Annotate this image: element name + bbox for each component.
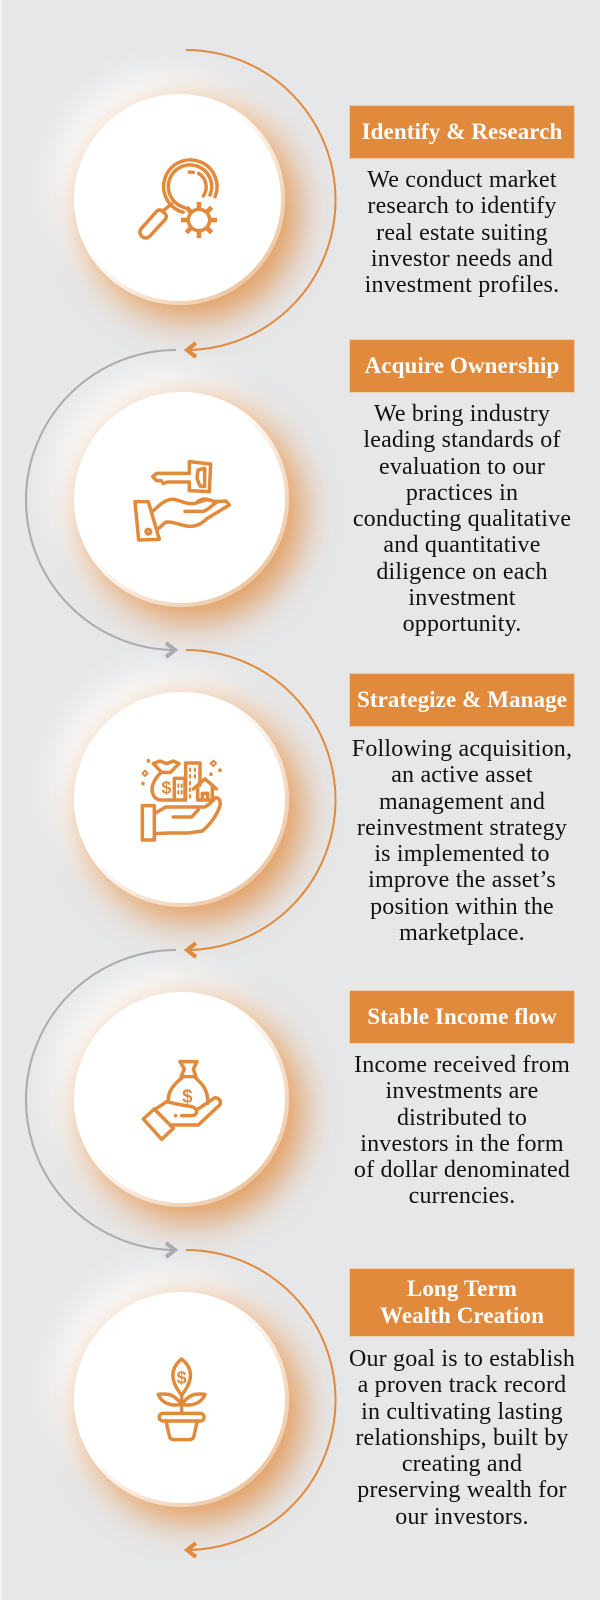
icon: plant with dollar leaf: $ [177,1367,187,1387]
text: step 5: our investors. [395,1504,529,1530]
heading: Identify & Research: Identify & Research [362,119,562,144]
text: step 3: management and [379,789,545,815]
text: step 4: distributed to [397,1105,527,1131]
text: step 2: We bring industry [374,401,550,427]
text: step 2: diligence on each [376,559,548,585]
text: step 4: Income received from [354,1052,570,1078]
heading: Stable Income flow: Stable Income flow [367,1004,557,1029]
heading: Acquire Ownership: Acquire Ownership [365,353,559,378]
text: step 4: currencies. [409,1183,515,1209]
text: step 3: improve the asset’s [368,867,556,893]
heading: Stable Income flow [349,990,575,1044]
icon: hand holding money bag: $ [182,1085,193,1106]
text: step 5: creating and [402,1451,522,1477]
text: step 5: in cultivating lasting [361,1399,563,1425]
heading: Long Term Wealth Creation: Long Term [407,1276,517,1301]
circle 5 [74,1292,289,1507]
heading: Long Term Wealth Creation [349,1268,575,1337]
text: step 4: investors in the form [360,1131,564,1157]
text: step 3 [352,736,572,946]
text: step 1: investment profiles. [365,272,559,298]
arc 5 with arrow [186,1250,336,1557]
text: step 1: real estate suiting [376,220,548,246]
heading: Strategize & Manage [349,673,575,727]
text: step 1 [365,167,559,298]
circle 2 [74,392,289,607]
heading: Acquire Ownership [349,339,575,393]
text: step 3: reinvestment strategy [357,815,567,841]
text: step 3: an active asset [391,762,533,788]
text: step 2 [353,401,571,637]
text: step 5: relationships, built by [355,1425,569,1451]
text: step 1: investor needs and [371,246,553,272]
heading: Long Term Wealth Creation: Wealth Creation [380,1302,544,1328]
text: step 2: and quantitative [383,532,541,558]
arc 4 with arrow [26,950,176,1257]
text: step 5: Our goal is to establish [349,1346,575,1372]
icon: hand holding money bag [143,1062,220,1139]
text: step 2: evaluation to our [379,454,545,480]
text: step 5 [349,1346,575,1530]
heading: Strategize & Manage: Strategize & Manage [357,687,567,712]
text: step 4: investments are [386,1078,538,1104]
icon: hand receiving key [135,462,229,540]
circle 4 [74,992,289,1207]
text: step 3: position within the [370,894,554,920]
text: step 2: practices in [406,480,518,506]
arc 2 with arrow [26,350,176,657]
text: step 1: We conduct market [367,167,557,193]
icon: magnifier with gear [140,160,217,238]
text: step 5: a proven track record [358,1372,566,1398]
text: step 3: Following acquisition, [352,736,572,762]
text: step 2: opportunity. [403,611,521,637]
arc 3 with arrow [186,650,336,957]
text: step 2: conducting qualitative [353,506,571,532]
text: step 5: preserving wealth for [357,1477,567,1503]
heading: Identify & Research [349,105,575,159]
text: step 3: marketplace. [399,920,525,946]
icon: plant with dollar leaf [158,1359,205,1440]
text: step 2: investment [408,585,516,611]
circle 3 [74,692,289,907]
text: step 1: research to identify [367,193,557,219]
arc 1 with arrow [186,50,336,357]
icon: hand holding money and property: $ [161,778,171,798]
text: step 4: of dollar denominated [354,1157,570,1183]
icon: hand holding money and property [142,761,220,840]
text: step 4 [354,1052,570,1209]
text: step 3: is implemented to [374,841,550,867]
circle 1 [74,94,285,305]
text: step 2: leading standards of [363,427,561,453]
